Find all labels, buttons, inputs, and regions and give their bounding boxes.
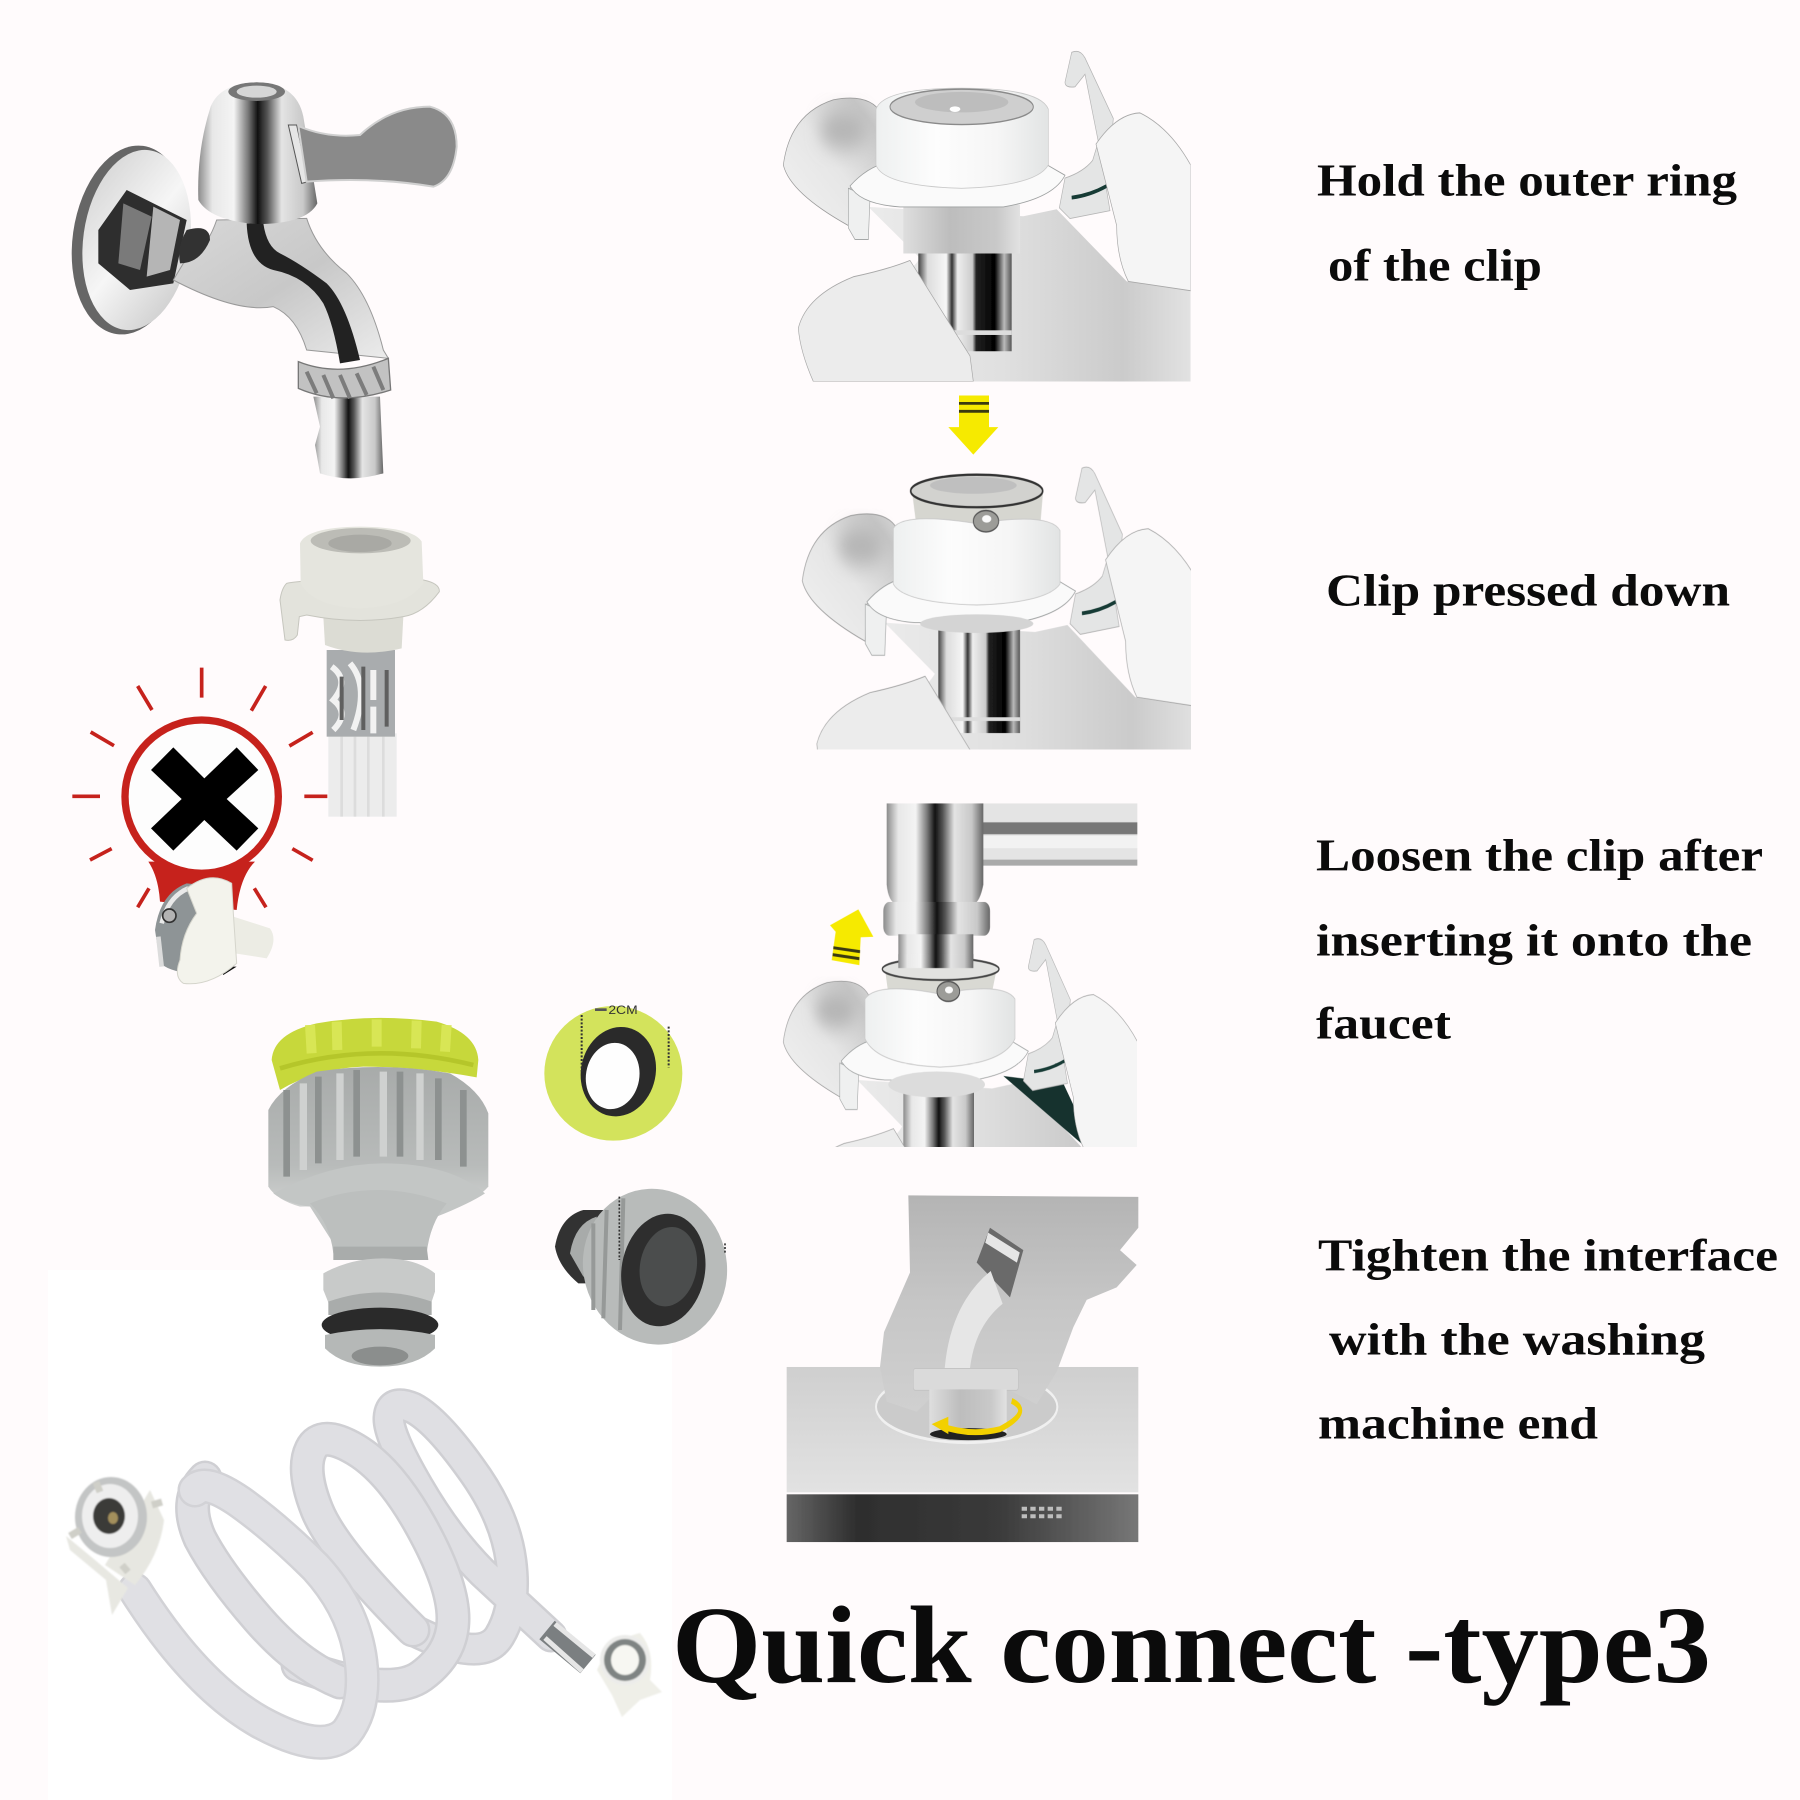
metal nipple (918, 253, 1012, 351)
large garden tap adapter (268, 1018, 488, 1367)
clip collar (323, 617, 403, 653)
dark gap (1003, 1076, 1087, 1145)
hose quick-connect clip (280, 527, 439, 817)
machine top panel (787, 1367, 1138, 1492)
icon: yellow arrow up (830, 909, 873, 965)
small white adapter (155, 878, 273, 984)
chrome rim (912, 489, 1043, 528)
step 2 illustration: clip pressed down (802, 466, 1191, 750)
collar under flange (920, 614, 1033, 633)
yellow rotation arrow (940, 1401, 1020, 1432)
black o-ring (322, 1308, 438, 1342)
X (151, 747, 258, 851)
white hose elbow (957, 1287, 997, 1377)
white outer ring (876, 88, 1048, 188)
near coil front sweep (135, 1486, 362, 1742)
rays (72, 668, 327, 907)
step text 4: Tighten the interface (1318, 1230, 1778, 1280)
metal nipple (938, 628, 1020, 733)
step text 3: faucet (1316, 998, 1452, 1048)
step text 4: machine end (1318, 1398, 1598, 1448)
step text 3 (1316, 830, 1763, 1048)
right white connector (597, 1633, 662, 1717)
grey knurled nut (268, 1067, 488, 1207)
gloved hand (880, 1195, 1138, 1412)
connector neck (929, 1389, 1007, 1434)
step text 3: Loosen the clip after (1316, 830, 1763, 880)
title: Quick connect -type3 (672, 1584, 1711, 1706)
flange (913, 1368, 1018, 1390)
step text 1 (1317, 154, 1737, 290)
near coil descending run (193, 1478, 340, 1682)
steel ball (973, 510, 999, 532)
crimped metal sleeve (327, 650, 395, 737)
step 3 illustration: loosen clip on faucet (782, 803, 1138, 1147)
yellow top ring (272, 1018, 478, 1090)
step text 2: Clip pressed down (1326, 564, 1730, 616)
step text 4 (1318, 1230, 1778, 1448)
white hose end (328, 733, 397, 817)
warning: red cross in circle (72, 668, 327, 984)
dimension label: 2CM (608, 1003, 638, 1017)
horizontal faucet pipe (983, 803, 1137, 866)
step text 1: of the clip (1328, 240, 1542, 290)
chrome plate (885, 969, 997, 994)
hole in panel (876, 1371, 1057, 1443)
flared lower body (273, 1163, 485, 1243)
step text 4: with the washing (1329, 1314, 1705, 1364)
icon: chrome faucet (60, 82, 457, 478)
far coil (389, 1405, 551, 1649)
left chrome connector (66, 1477, 164, 1615)
middle coil (298, 1439, 453, 1685)
nozzle end (325, 1329, 435, 1367)
icon: yellow arrow down (948, 395, 998, 455)
white cylinder (893, 519, 1060, 605)
step 1 illustration: hold outer ring (783, 51, 1191, 382)
yellow ring front view (544, 1003, 682, 1141)
ring (125, 720, 278, 873)
grey adapter socket view (555, 1172, 744, 1361)
braided ferrule (547, 1630, 588, 1664)
white ring (865, 989, 1015, 1067)
step text 3: inserting it onto the (1316, 914, 1752, 966)
white backing of hose photo (48, 1270, 672, 1800)
chrome spindle (887, 803, 983, 904)
metal below (903, 1091, 974, 1148)
coiled inlet hose (135, 1405, 594, 1742)
step 4 illustration: tighten on washing machine (787, 1195, 1138, 1542)
red pointer (148, 862, 255, 910)
step text 1: Hold the outer ring (1317, 154, 1737, 206)
dark front strip (787, 1494, 1138, 1542)
grey collar (903, 205, 1020, 253)
coupling collar (323, 1258, 435, 1307)
